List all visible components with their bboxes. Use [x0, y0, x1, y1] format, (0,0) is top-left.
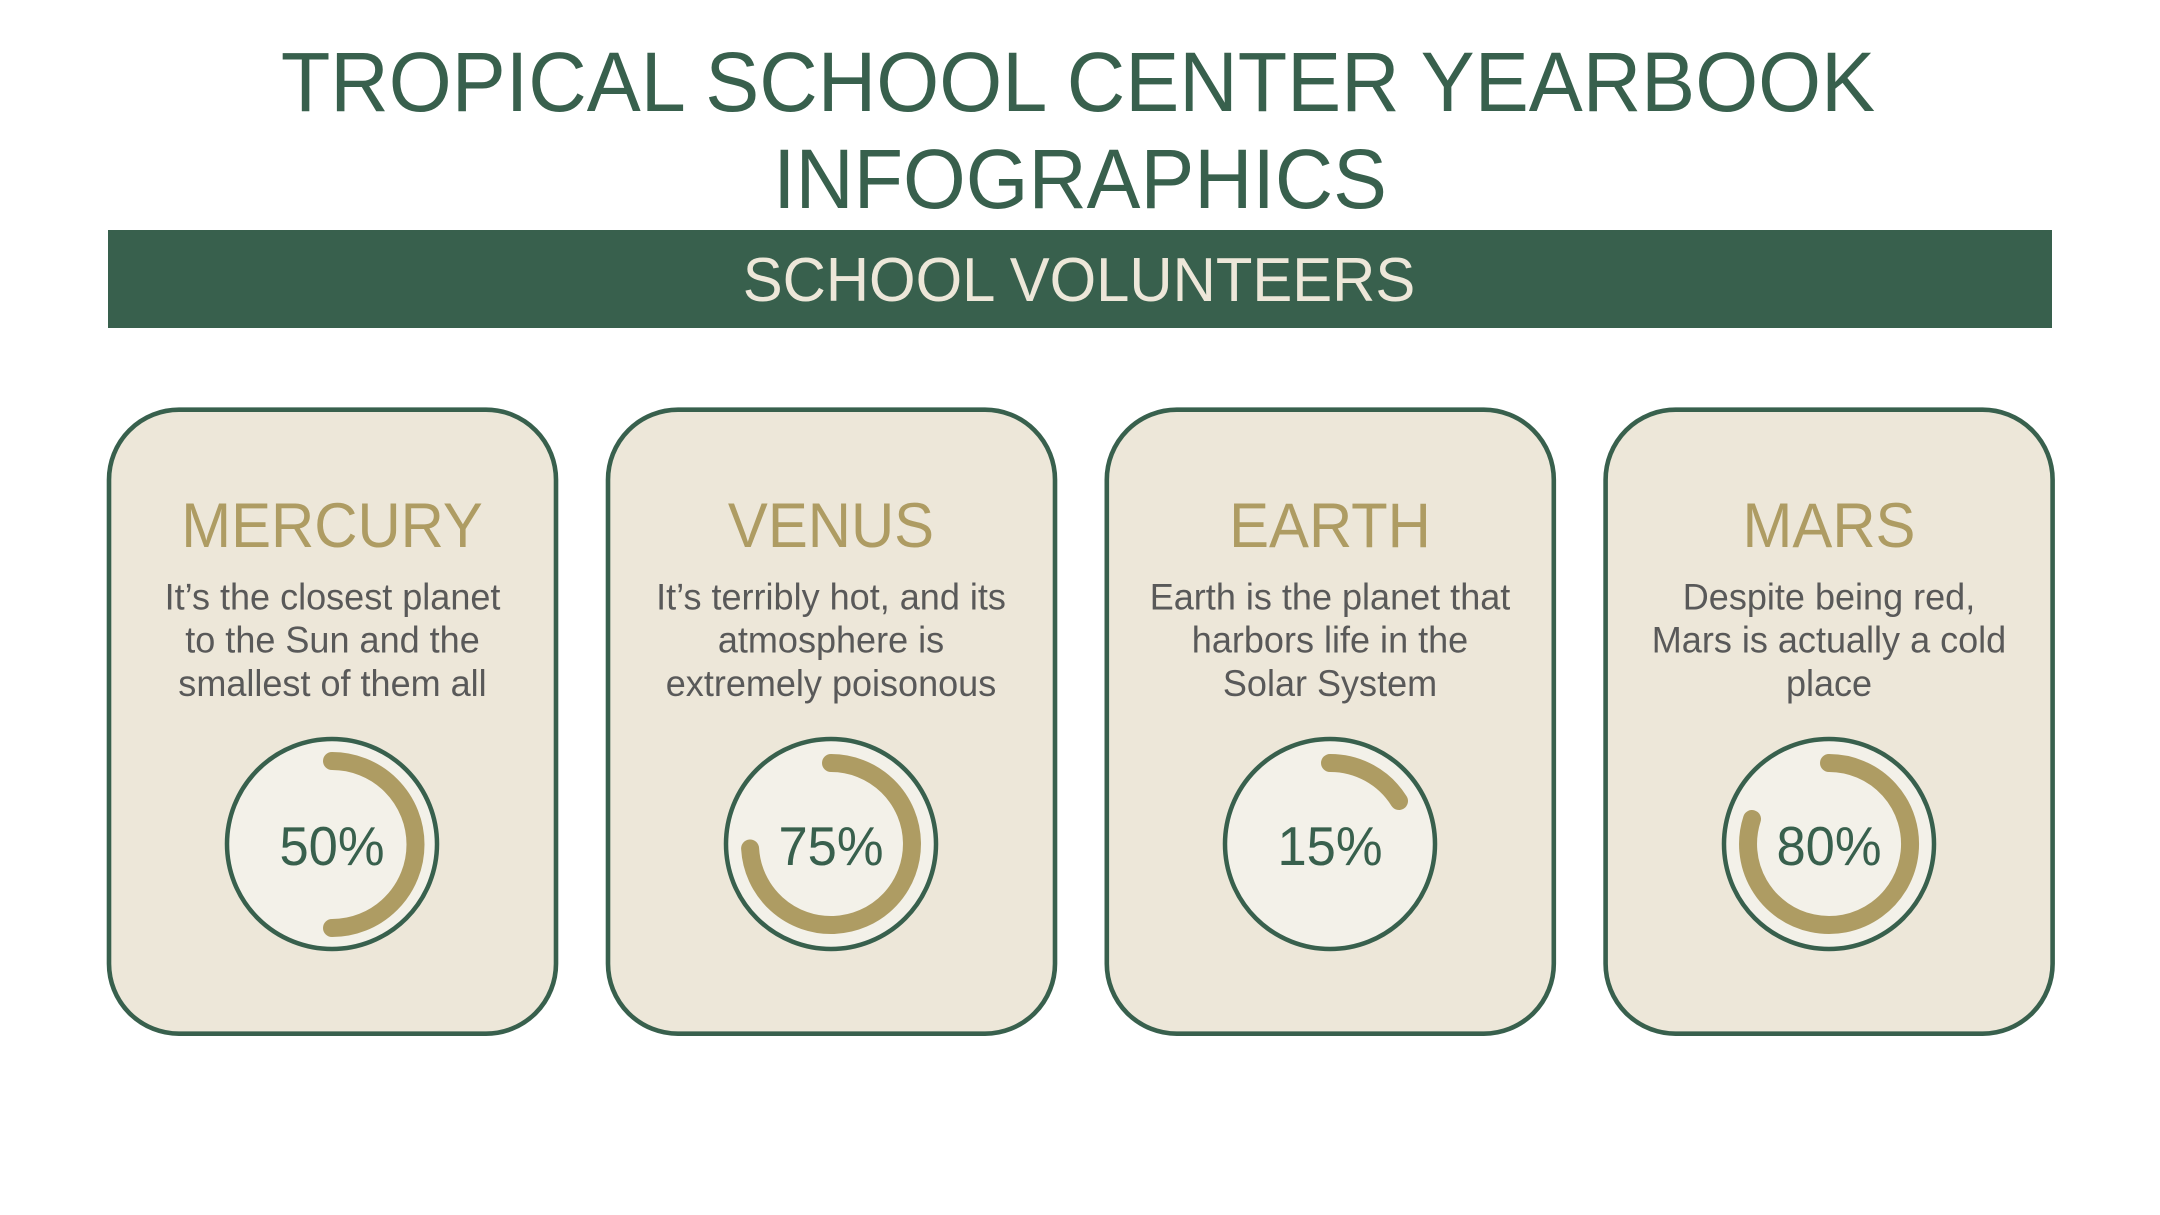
- text: mercury description: to the Sun and the: [185, 619, 480, 661]
- text: mercury description: [165, 576, 500, 704]
- progress ring: 15%: 15%: [1277, 816, 1383, 877]
- text: mercury description: smallest of them all: [178, 663, 487, 704]
- title: [281, 36, 1875, 226]
- panel: earth: [1107, 410, 1554, 1034]
- text: earth description: Earth is the planet that: [1150, 576, 1510, 618]
- text: mercury description: It’s the closest planet: [165, 576, 500, 618]
- text: earth description: [1150, 576, 1510, 704]
- progress ring: 80%: 80%: [1776, 816, 1882, 877]
- text: venus description: [656, 576, 1006, 704]
- heading: mercury: MERCURY: [181, 491, 483, 561]
- text: earth description: harbors life in the: [1192, 619, 1468, 661]
- title: INFOGRAPHICS: [773, 133, 1387, 226]
- text: mars description: place: [1786, 663, 1872, 704]
- progress ring: 75%: [726, 739, 936, 949]
- progress ring: 75%: 75%: [778, 816, 884, 877]
- text: venus description: atmosphere is: [718, 619, 944, 661]
- heading: mars: MARS: [1743, 491, 1915, 561]
- progress ring: 80%: [1724, 739, 1934, 949]
- text: mars description: Mars is actually a cold: [1652, 619, 2006, 661]
- progress ring: 50%: [227, 739, 437, 949]
- heading: earth: EARTH: [1229, 491, 1431, 561]
- banner: school volunteers: [108, 230, 2052, 328]
- text: venus description: It’s terribly hot, and its: [656, 576, 1006, 618]
- title: TROPICAL SCHOOL CENTER YEARBOOK: [281, 36, 1875, 129]
- text: mars description: Despite being red,: [1683, 576, 1975, 618]
- panel: venus: [608, 410, 1055, 1034]
- panel: mercury: [109, 410, 556, 1034]
- text: venus description: extremely poisonous: [666, 663, 996, 704]
- heading: venus: VENUS: [728, 491, 934, 561]
- text: mars description: [1652, 576, 2006, 704]
- text: earth description: Solar System: [1223, 663, 1437, 704]
- banner: school volunteers: SCHOOL VOLUNTEERS: [743, 245, 1415, 314]
- progress ring: 15%: [1225, 739, 1435, 949]
- progress ring: 50%: 50%: [279, 816, 385, 877]
- panel: mars: [1606, 410, 2053, 1034]
